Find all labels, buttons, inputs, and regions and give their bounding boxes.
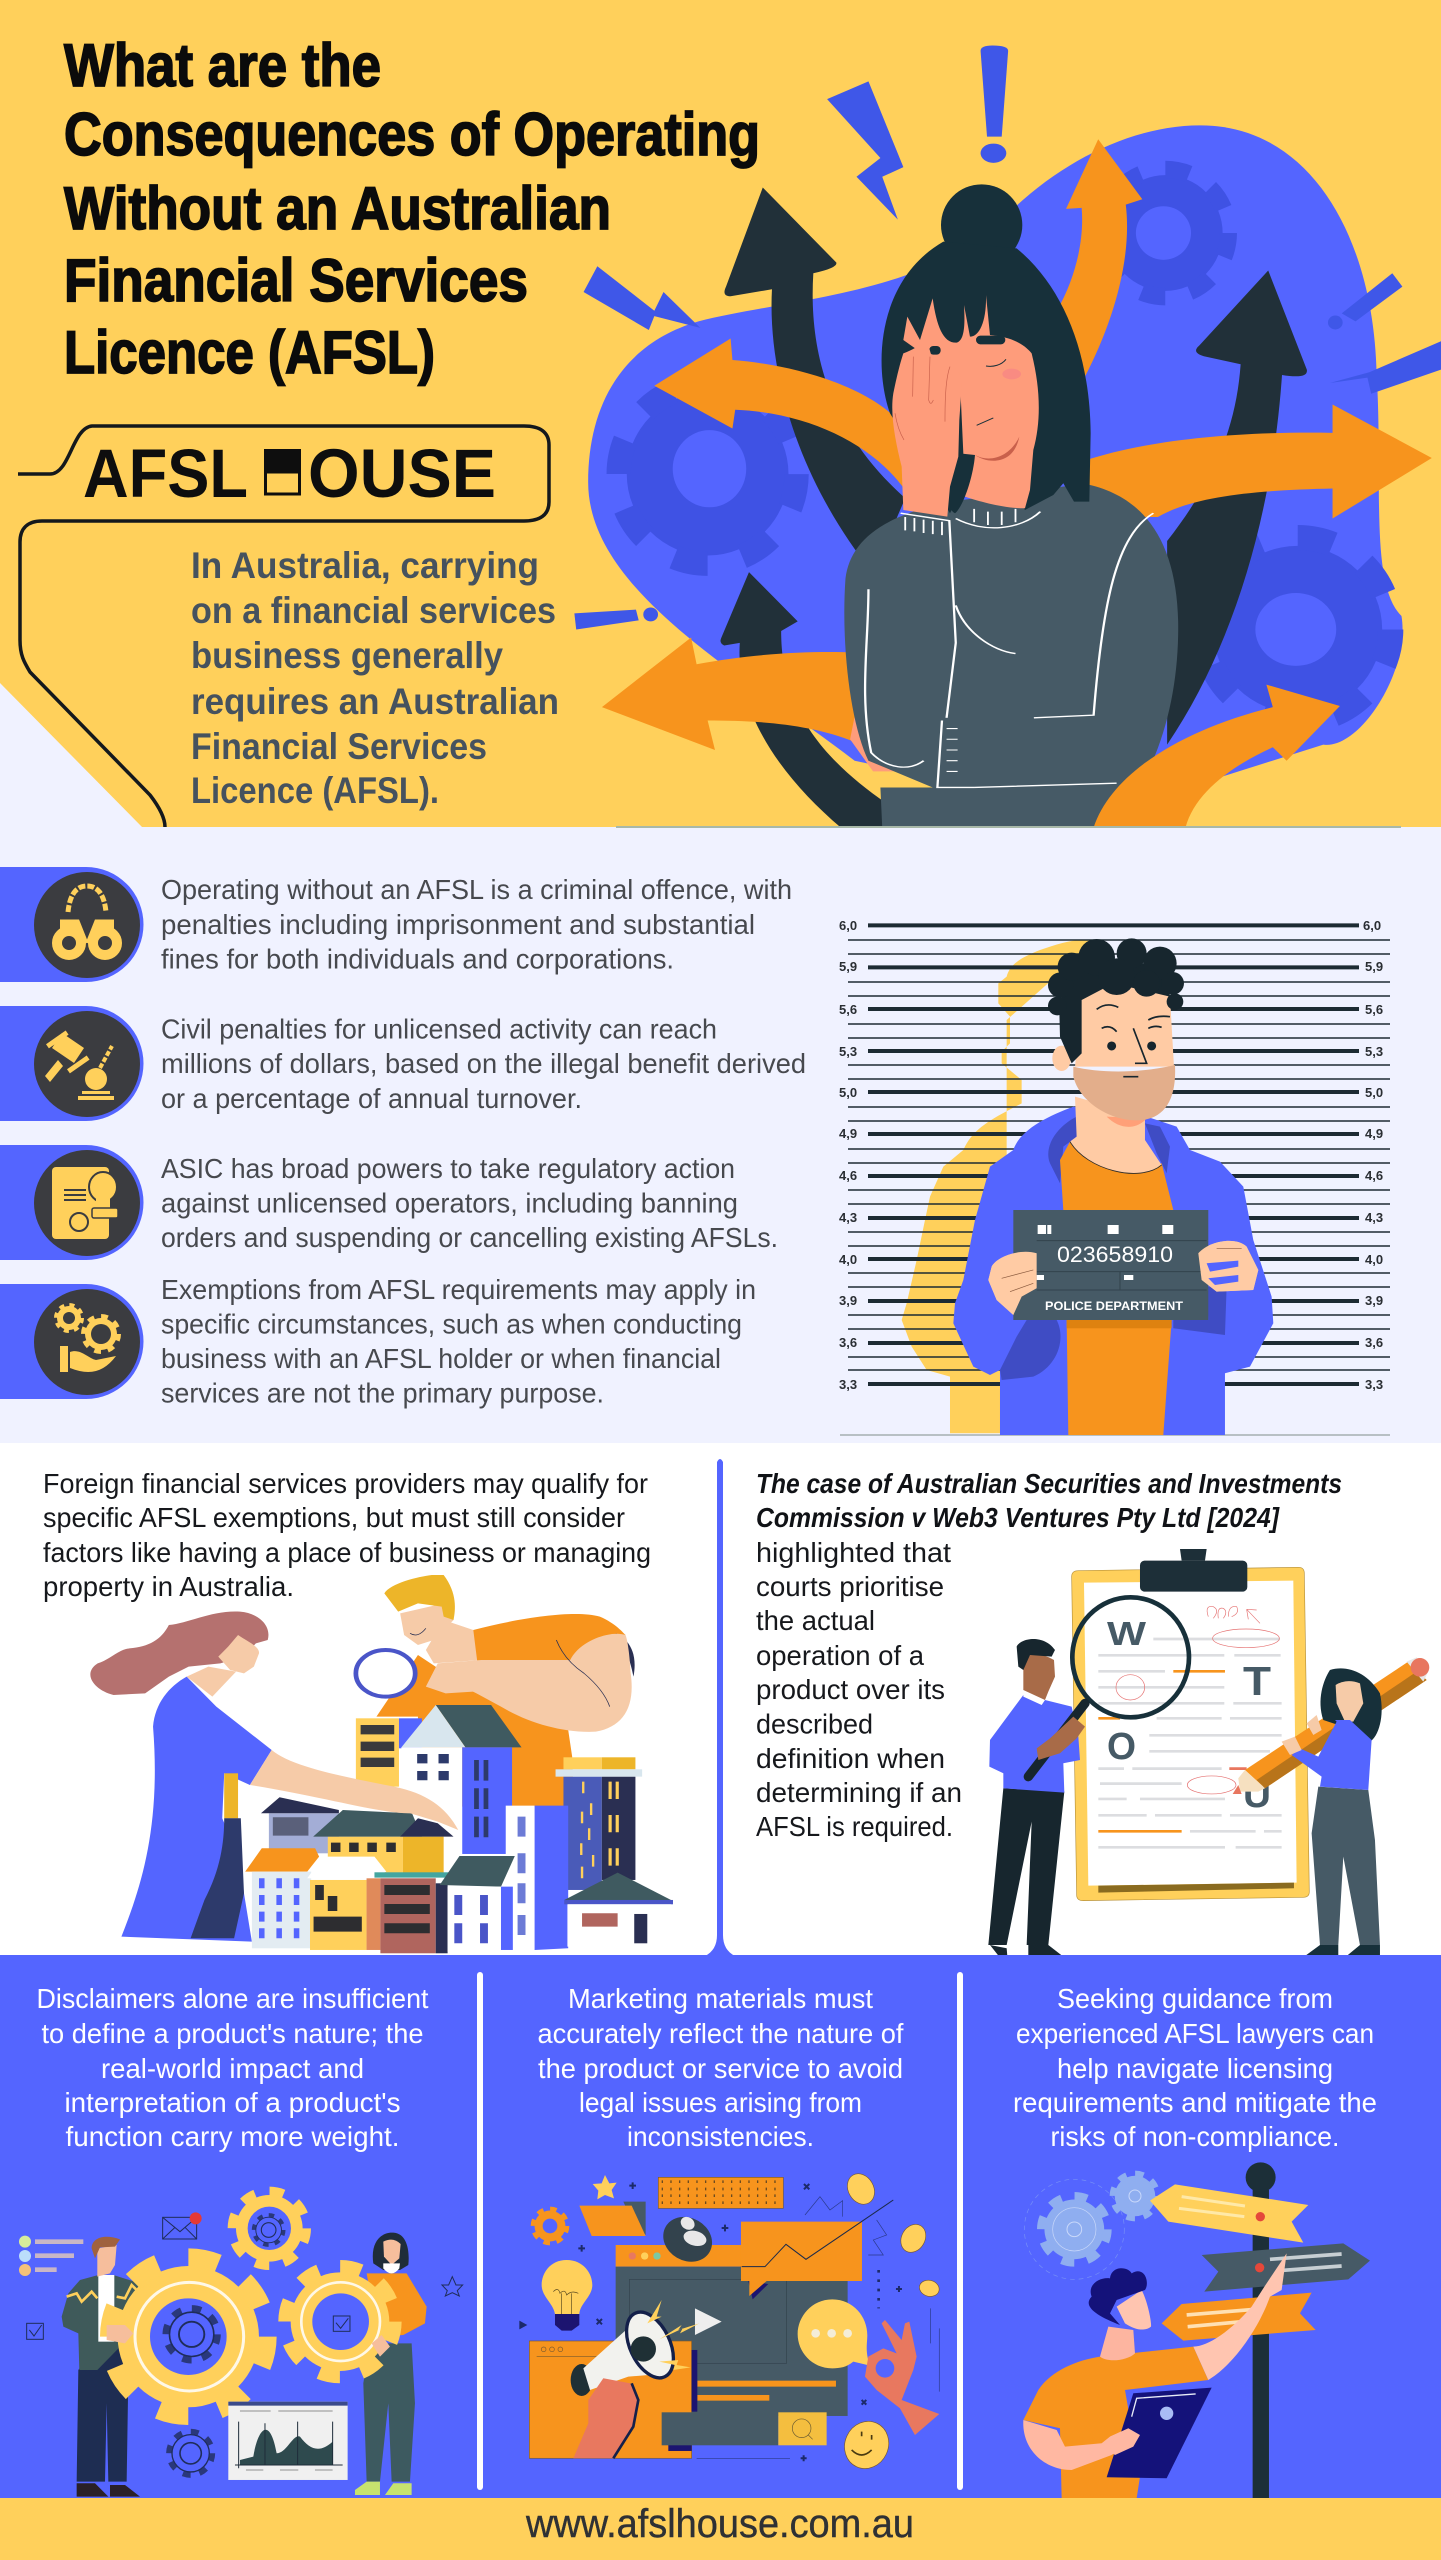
- title: Consequences of Operating: [64, 101, 760, 168]
- footer: www.afslhouse.com.au: [525, 2502, 914, 2546]
- illustration: people over model city: [90, 1575, 673, 1953]
- height labels: 4,0: [839, 1252, 857, 1267]
- tip 3: Seeking guidance from: [1057, 1983, 1333, 2014]
- ok hand: [865, 2320, 939, 2435]
- bottom right orange arrow: [1094, 685, 1340, 828]
- row 2: civil penalties: [0, 1006, 806, 1121]
- text: foreign providers: [43, 1468, 651, 1602]
- height labels: 5,3: [839, 1044, 857, 1059]
- row 4: exemptions: business with an AFSL holder or when financial: [161, 1343, 721, 1374]
- text: the case: operation of a: [756, 1640, 924, 1671]
- height labels: 4,9: [1365, 1126, 1383, 1141]
- intro paragraph: [191, 545, 559, 811]
- panel: white case section: [0, 1443, 1441, 1968]
- tip 3: risks of non-compliance.: [1050, 2121, 1340, 2152]
- height labels: 6,0: [839, 918, 857, 933]
- dark arrows: [720, 187, 1307, 828]
- yellow silhouette: [902, 940, 1095, 1433]
- blue blob: [588, 125, 1403, 814]
- lightning bolts and exclamation mark: [574, 46, 1441, 629]
- pencil: [1233, 1657, 1429, 1794]
- height labels: 5,0: [839, 1085, 857, 1100]
- height labels: 5,9: [839, 959, 857, 974]
- orange gear: [533, 2209, 567, 2243]
- clipboard letters: O: [1107, 1726, 1136, 1768]
- smiley face: [852, 2432, 872, 2455]
- intro paragraph: requires an Australian: [191, 681, 559, 722]
- row 3: ASIC powers: ASIC has broad powers to take regulatory action: [161, 1153, 735, 1184]
- row 1: criminal offence: Operating without an AFSL is a criminal offence, with: [161, 874, 792, 905]
- illustration: people with gears: [19, 2192, 463, 2497]
- height labels: 4,3: [839, 1210, 857, 1225]
- logo: AFSL HOUSE: OUSE: [308, 435, 496, 512]
- row 4: exemptions: specific circumstances, such as when conducting: [161, 1308, 742, 1340]
- tip 1: interpretation of a product's: [64, 2087, 400, 2118]
- title: Without an Australian: [64, 175, 611, 242]
- woman: [1282, 1668, 1382, 1956]
- height labels: 3,3: [1365, 1377, 1383, 1392]
- illustration: man at signpost: [1023, 2162, 1370, 2498]
- text: the case: courts prioritise: [756, 1571, 944, 1602]
- height labels: 3,3: [839, 1377, 857, 1392]
- height labels: 4,6: [1365, 1168, 1383, 1183]
- tip 1: Disclaimers alone are insufficient: [36, 1983, 429, 2014]
- hero baseline: [616, 826, 1401, 828]
- folder: [579, 2202, 646, 2236]
- sign yellow: [1150, 2184, 1308, 2243]
- clipboard: [1072, 1549, 1309, 1901]
- man with magnifier: [356, 1575, 635, 1807]
- tip 2: inconsistencies.: [627, 2121, 814, 2152]
- title: Licence (AFSL): [64, 319, 435, 386]
- height labels: 5,0: [1365, 1085, 1383, 1100]
- tip 1: to define a product's nature; the: [42, 2018, 424, 2049]
- row 1: criminal offence: [0, 867, 792, 982]
- logo frame outline: [18, 426, 549, 827]
- row 2: civil penalties: Civil penalties for unlicensed activity can reach: [161, 1014, 717, 1044]
- board text: [1045, 1242, 1184, 1313]
- coins: [837, 2169, 941, 2476]
- light bulb: [542, 2260, 592, 2331]
- figure: man holding police board: [953, 938, 1273, 1435]
- tip 2: Marketing materials must: [568, 1983, 873, 2014]
- row 3: ASIC powers: against unlicensed operators, including banning: [161, 1188, 738, 1218]
- height labels: 5,3: [1365, 1044, 1383, 1059]
- illustration: marketing collage: [519, 2169, 941, 2476]
- intro paragraph: business generally: [191, 635, 503, 676]
- sign dark: [1202, 2243, 1370, 2292]
- row 3: ASIC powers: [0, 1145, 778, 1260]
- tip 3: experienced AFSL lawyers can: [1016, 2018, 1374, 2049]
- divider: [705, 1459, 735, 1956]
- chat bubble: [798, 2299, 870, 2368]
- hoodie: [953, 1107, 1273, 1435]
- logo: AFSL HOUSE: AFSL: [83, 435, 248, 512]
- title: [64, 32, 760, 386]
- tip 1: [36, 1983, 429, 2152]
- tip 2: [538, 1983, 904, 2152]
- height labels: 5,6: [839, 1002, 857, 1017]
- orange arrows: [602, 139, 1432, 750]
- sign orange: [1162, 2293, 1316, 2341]
- icon: document and stamp: [52, 1167, 118, 1239]
- curly hair: [1048, 938, 1184, 1063]
- tip 3: help navigate licensing: [1057, 2053, 1333, 2084]
- panel: penalties list: [0, 867, 806, 1409]
- text: the case: Commission v Web3 Ventures Pty Ltd [2024]: [756, 1502, 1280, 1533]
- people with magnifier and pencil: [988, 1597, 1429, 1968]
- woman: [90, 1612, 272, 1942]
- tip 3: [1013, 1983, 1377, 2152]
- row 2: civil penalties: millions of dollars, based on the illegal benefit derived: [161, 1048, 806, 1079]
- woman arm over roofs: [250, 1750, 458, 1830]
- height labels: 3,6: [839, 1335, 857, 1350]
- orange panel with megaphone: [529, 2300, 699, 2458]
- height chart: mugshot: [839, 918, 1390, 1436]
- small icons: [27, 2212, 463, 2475]
- clipboard letters: W: [1107, 1615, 1147, 1652]
- woman behind gear: [355, 2233, 427, 2495]
- dotted panel: [658, 2177, 783, 2208]
- woman head and hand: [882, 184, 1091, 517]
- row 4: exemptions: [0, 1274, 756, 1409]
- text: foreign providers: factors like having a place of business or managing: [43, 1537, 651, 1568]
- tip 1: real-world impact and: [101, 2053, 364, 2084]
- text: foreign providers: property in Australia.: [43, 1571, 294, 1602]
- hero illustration: stressed woman with arrows: [574, 46, 1441, 828]
- fingers over board: [988, 1241, 1258, 1315]
- height labels: 4,0: [1365, 1252, 1383, 1267]
- intro paragraph: In Australia, carrying: [191, 545, 539, 586]
- status list: [19, 2236, 83, 2276]
- row 1: criminal offence: fines for both individuals and corporations.: [161, 944, 674, 974]
- dividers: [477, 1972, 963, 2490]
- text: the case: determining if an: [756, 1777, 962, 1808]
- intro paragraph: Licence (AFSL).: [191, 770, 439, 811]
- board text: 023658910: [1057, 1242, 1173, 1267]
- shirt: [1060, 1142, 1173, 1435]
- height labels: 6,0: [1363, 918, 1381, 933]
- text: the case: described: [756, 1708, 873, 1740]
- height labels: 3,9: [1365, 1293, 1383, 1308]
- row 4: exemptions: Exemptions from AFSL requirements may apply in: [161, 1274, 756, 1305]
- text: the case: the actual: [756, 1605, 875, 1636]
- icon: handcuffs: [57, 886, 117, 955]
- background gears: [619, 169, 1391, 721]
- panel: blue tips section: [0, 1955, 1441, 2498]
- hands over gears: [107, 2325, 390, 2357]
- icon: gavel and money: [45, 1030, 114, 1100]
- tip 1: function carry more weight.: [66, 2121, 400, 2152]
- tip 3: requirements and mitigate the: [1013, 2087, 1377, 2118]
- height labels: 4,9: [839, 1126, 857, 1141]
- text: the case: AFSL is required.: [756, 1811, 953, 1842]
- tip 2: legal issues arising from: [579, 2087, 862, 2118]
- star and decoration: [519, 2175, 939, 2461]
- face and beard: [1052, 1046, 1071, 1071]
- text: the case: [756, 1468, 1342, 1842]
- text: the case: product over its: [756, 1674, 945, 1705]
- neck: [1070, 1097, 1162, 1173]
- height labels: 5,9: [1365, 959, 1383, 974]
- buildings: [245, 1705, 673, 1953]
- intro paragraph: Financial Services: [191, 726, 487, 767]
- text: the case: definition when: [756, 1743, 945, 1774]
- browser window: [616, 2245, 848, 2416]
- height labels: 4,3: [1365, 1210, 1383, 1225]
- pole: [1246, 2162, 1276, 2498]
- height labels: 5,6: [1365, 1002, 1383, 1017]
- chart speech box: [741, 2200, 893, 2299]
- man: [62, 2237, 142, 2497]
- police board: [1013, 1210, 1208, 1320]
- clipboard letters: [1107, 1615, 1271, 1816]
- height labels: 3,6: [1365, 1335, 1383, 1350]
- row 4: exemptions: services are not the primary purpose.: [161, 1378, 604, 1409]
- footer: [0, 2498, 1441, 2560]
- icon: gears and hand: [56, 1305, 119, 1372]
- row 3: ASIC powers: orders and suspending or cancelling existing AFSLs.: [161, 1222, 778, 1253]
- row 1: criminal offence: penalties including imprisonment and substantial: [161, 909, 755, 940]
- title: Financial Services: [64, 247, 528, 314]
- tip 2: the product or service to avoid: [538, 2053, 903, 2084]
- big gear: [111, 2192, 394, 2414]
- man: [1023, 2253, 1287, 2498]
- text: foreign providers: Foreign financial services providers may qualify for: [43, 1468, 648, 1499]
- hands: [988, 1241, 1258, 1315]
- chart window: [228, 2402, 348, 2480]
- title: What are the: [64, 32, 381, 99]
- facial features: [1097, 1005, 1170, 1077]
- tip 2: accurately reflect the nature of: [538, 2018, 904, 2049]
- height labels: 3,9: [839, 1293, 857, 1308]
- row 2: civil penalties: or a percentage of annual turnover.: [161, 1083, 582, 1114]
- intro paragraph: on a financial services: [191, 590, 556, 631]
- man: [988, 1597, 1189, 1968]
- search bar: [662, 2412, 827, 2451]
- gears: [1024, 2174, 1157, 2279]
- height lines: [848, 925, 1390, 1384]
- panel: yellow header: [0, 0, 1441, 828]
- lower hand behind sleeve: [850, 707, 919, 771]
- logo: AFSL HOUSE: [83, 435, 496, 512]
- dark coin button: [655, 2208, 720, 2270]
- text: the case: highlighted that: [756, 1537, 951, 1568]
- text: the case: The case of Australian Securities and Investments: [756, 1468, 1342, 1499]
- height labels: [839, 918, 1383, 1392]
- clipboard letters: U: [1243, 1774, 1271, 1816]
- height labels: 4,6: [839, 1168, 857, 1183]
- board text: POLICE DEPARTMENT: [1045, 1299, 1184, 1313]
- sweater: [844, 484, 1178, 828]
- clipboard letters: T: [1243, 1658, 1271, 1704]
- text: foreign providers: specific AFSL exemptions, but must still consider: [43, 1502, 625, 1533]
